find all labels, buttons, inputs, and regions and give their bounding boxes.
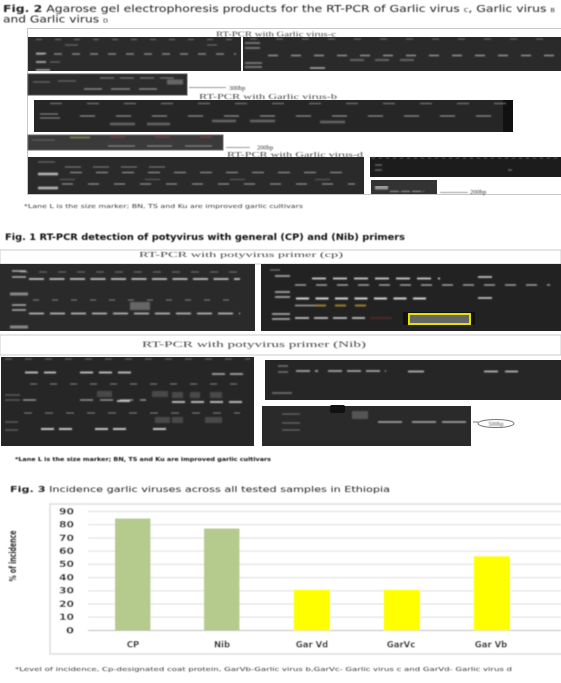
heading: potyvirus primer (Nib): RT-PCR with potyvirus primer (Nib)	[142, 339, 366, 349]
label: 300bp marker: 300bp	[229, 85, 245, 92]
title: figure 2 heading	[3, 4, 556, 26]
y axis tick labels: 70	[59, 534, 74, 544]
highlight: yellow size marker box	[403, 312, 475, 325]
heading: potyvirus primer (cp): RT-PCR with potyvirus primer (cp)	[139, 250, 344, 259]
footnote: figure 2 lane note: *Lane L is the size marker; BN, TS and Ku are improved garlic cultivars	[24, 204, 303, 210]
panel: figure 2 gel composite	[28, 28, 561, 196]
label: 200bp marker (virus b): 200bp	[257, 144, 273, 152]
x axis labels: Gar Vb	[475, 640, 507, 650]
y axis tick labels	[59, 508, 74, 636]
gel: Nib right lower	[262, 405, 471, 446]
x axis labels: Nib	[214, 640, 230, 650]
label: 200bp marker (virus d)	[440, 189, 486, 196]
bar: GarVc	[384, 590, 420, 630]
y axis tick labels: 50	[59, 560, 74, 570]
gel: CP left	[0, 264, 255, 331]
footnote: figure 1 lane note: *Lane L is the size marker; BN, TS and Ku are improved garlic cultivars	[15, 457, 271, 463]
gel: Nib left	[1, 357, 254, 446]
gel: virus c continuation	[28, 74, 187, 95]
footnote: figure 3 abbreviations: *Level of incidence, Cp-designated coat protein, GarVb-Garlic virus b,GarVc- Garlic virus c and GarVd- Garlic virus d	[15, 667, 512, 673]
gel: virus d left	[28, 157, 364, 194]
label: 200bp marker (virus b)	[226, 144, 273, 152]
y axis title: % of incidence	[8, 530, 19, 582]
y axis tick labels: 10	[59, 613, 74, 623]
title: figure 3 heading: Fig. 3 Incidence garlic viruses across all tested samples in Ethiopia	[10, 485, 390, 494]
x axis labels: GarVc	[387, 640, 415, 650]
bar chart: incidence of garlic viruses	[8, 504, 561, 654]
heading: RT-PCR with Garlic virus-c: RT-PCR with Garlic virus-c	[216, 30, 337, 38]
gel: virus d right lower	[371, 180, 437, 194]
bar: Gar Vd	[294, 590, 330, 630]
gel: virus b continuation	[28, 135, 223, 150]
y axis tick labels: 30	[59, 586, 74, 596]
title: figure 1 heading: Fig. 1 RT-PCR detection of potyvirus with general (CP) and (Nib) primers	[5, 233, 405, 243]
label: 500bp callout: 500bp	[488, 422, 504, 428]
y axis tick labels: 80	[59, 520, 74, 530]
y axis tick labels: 60	[59, 547, 74, 557]
heading: RT-PCR with Garlic virus-d: RT-PCR with Garlic virus-d	[227, 150, 363, 159]
gel: Nib right upper	[265, 360, 561, 400]
gel: virus c right	[243, 37, 561, 71]
y axis tick labels: 90	[59, 508, 74, 518]
panel: figure 1 gel composite	[0, 250, 561, 446]
bar: CP	[115, 518, 150, 630]
gel: CP right	[261, 264, 561, 331]
y axis tick labels: 40	[59, 574, 74, 584]
gel: virus c left	[28, 37, 241, 71]
lane labels: Nib right upper	[280, 357, 555, 359]
label: 200bp marker (virus d): 200bp	[470, 189, 486, 196]
label: 300bp marker	[189, 85, 245, 92]
y axis gridlines	[88, 512, 561, 617]
y axis tick labels: 0	[66, 626, 74, 636]
x axis labels: CP	[127, 640, 139, 650]
y axis tick labels: 20	[59, 600, 74, 610]
x axis labels: Gar Vd	[296, 640, 328, 650]
x axis labels	[127, 640, 507, 650]
gel: virus b	[34, 100, 513, 132]
bar: Gar Vb	[474, 556, 510, 630]
title: figure 2 heading: Fig. 2 Agarose gel electrophoresis products for the RT-PCR of Garlic virus C, Garlic virus B	[3, 4, 556, 15]
title: figure 2 heading: and Garlic virus D	[3, 14, 108, 26]
heading: RT-PCR with Garlic virus-b: RT-PCR with Garlic virus-b	[199, 92, 337, 101]
label: 500bp callout	[473, 420, 514, 428]
bar: Nib	[204, 528, 240, 630]
gel: virus d right upper	[370, 157, 561, 177]
